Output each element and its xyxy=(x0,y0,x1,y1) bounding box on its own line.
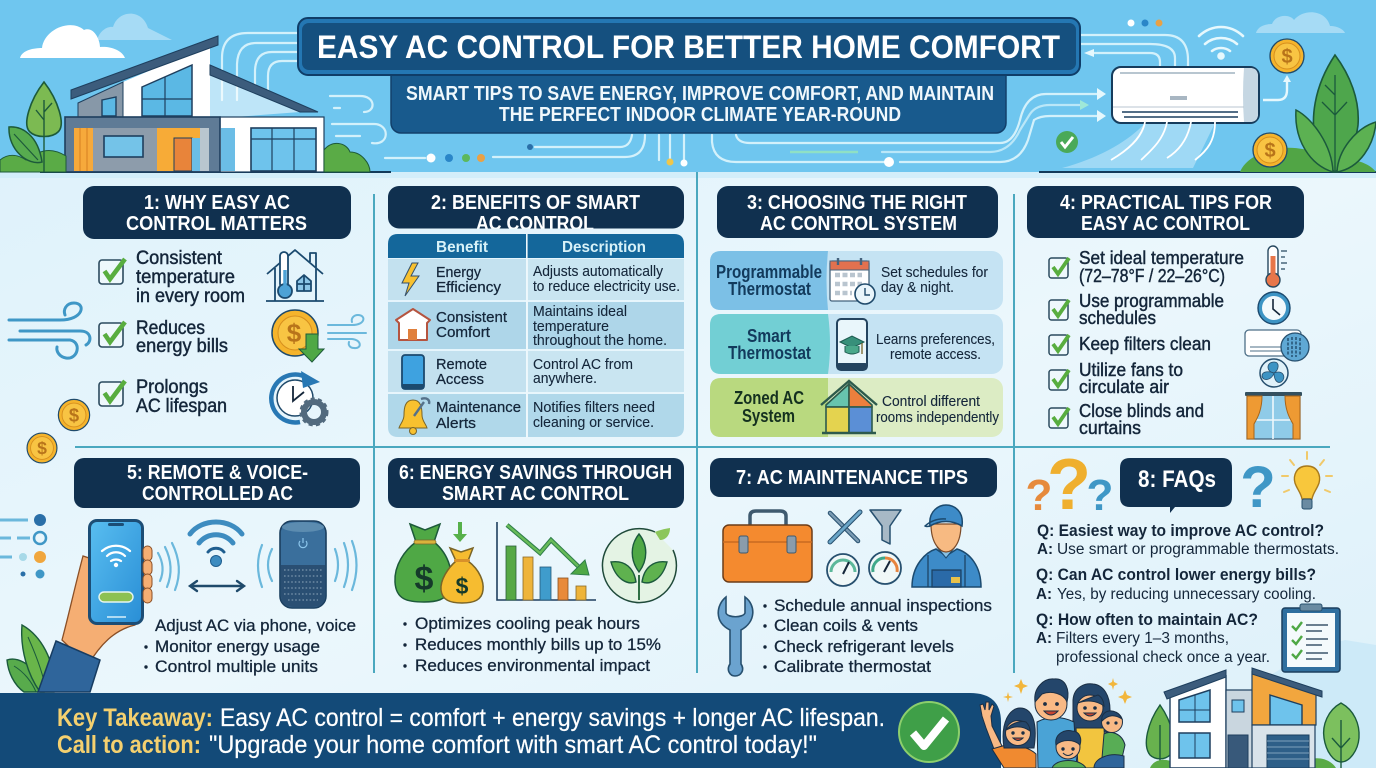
row: maintenance alerts xyxy=(399,398,655,434)
icon: question marks: ? xyxy=(1240,455,1276,520)
icon: hand holding phone xyxy=(38,519,152,692)
list: remote features: Control multiple units xyxy=(155,657,318,676)
sparkles xyxy=(1003,678,1132,704)
icon: thermometer xyxy=(1266,246,1287,287)
card: programmable thermostat: Set schedules for xyxy=(881,265,988,281)
tip: utilize fans: Utilize fans to xyxy=(1079,360,1183,380)
item: reduces energy bills: energy bills xyxy=(136,336,228,357)
row: maintenance alerts: cleaning or service. xyxy=(533,415,654,431)
icon: AC with filter xyxy=(1245,330,1309,361)
decoration: leaf bottom left xyxy=(7,625,54,692)
item: prolongs AC lifespan: AC lifespan xyxy=(136,396,227,417)
panel 2: benefits of smart AC control xyxy=(388,186,684,438)
icon: clock with gear xyxy=(271,371,327,425)
card: smart thermostat: remote access. xyxy=(890,347,981,363)
heading 4 xyxy=(1027,186,1304,238)
plants right xyxy=(1240,55,1376,172)
row: remote access: anywhere. xyxy=(533,371,597,387)
row: remote access: Remote xyxy=(436,356,487,373)
heading 6: SMART AC CONTROL xyxy=(442,483,629,505)
item: reduces energy bills: Reduces xyxy=(136,318,205,339)
faq 1: Q: Easiest way to improve AC control? xyxy=(1037,521,1324,540)
heading 3: 3: CHOOSING THE RIGHT xyxy=(747,192,967,214)
row: remote access xyxy=(402,355,633,389)
header decorative dots xyxy=(426,20,1162,166)
list: energy savings: Optimizes cooling peak hours xyxy=(415,614,640,633)
icon: technician xyxy=(912,505,981,587)
heading 5 xyxy=(74,458,360,508)
heading 8: 8: FAQs xyxy=(1138,466,1216,493)
subtitle xyxy=(406,83,994,126)
card: zoned AC system xyxy=(710,378,1003,437)
heading 1: CONTROL MATTERS xyxy=(126,213,307,235)
panel 7: AC maintenance tips xyxy=(710,458,997,676)
icon: smartphone with graduation cap xyxy=(837,319,867,370)
row: consistent comfort xyxy=(396,304,667,349)
subtitle: THE PERFECT INDOOR CLIMATE YEAR-ROUND xyxy=(499,104,901,126)
heading 1: 1: WHY EASY AC xyxy=(144,192,290,214)
cloud right xyxy=(1256,12,1345,33)
card: zoned AC system: Zoned AC xyxy=(734,388,804,408)
icon: question marks xyxy=(1026,445,1276,525)
page background xyxy=(0,172,1376,768)
heading 8 xyxy=(1120,458,1232,513)
item: consistent temperature: in every room xyxy=(136,286,245,307)
section dividers xyxy=(75,172,1330,673)
icon: crossed tools xyxy=(830,512,860,542)
icon: question marks: ? xyxy=(1087,471,1113,520)
faq 3: Filters every 1–3 months, xyxy=(1056,630,1229,647)
row: maintenance alerts: Maintenance xyxy=(436,399,521,416)
icon: smart speaker xyxy=(258,521,356,608)
heading 5: 5: REMOTE & VOICE- xyxy=(127,462,308,484)
panel 8: FAQs xyxy=(1026,445,1340,672)
faq 1 xyxy=(1037,521,1339,558)
house left xyxy=(65,36,324,172)
icon: clipboard checklist xyxy=(1282,604,1340,672)
card: programmable thermostat: Programmable xyxy=(716,262,822,282)
panel 3: choosing the right AC control system xyxy=(710,186,1003,437)
heading 4: 4: PRACTICAL TIPS FOR xyxy=(1060,192,1272,214)
subtitle: SMART TIPS TO SAVE ENERGY, IMPROVE COMFORT, AND MAINTAIN xyxy=(406,83,994,105)
benefits table xyxy=(388,234,684,438)
faq 2: Q: Can AC control lower energy bills? xyxy=(1036,565,1316,584)
tip: use programmable schedules: Use programmable xyxy=(1079,291,1224,311)
title banner xyxy=(298,18,1080,133)
key takeaway: Key Takeaway: xyxy=(57,704,213,732)
faq 2 xyxy=(1036,565,1316,603)
card: programmable thermostat xyxy=(710,251,1003,310)
icon: funnel xyxy=(870,510,901,544)
item: consistent temperature xyxy=(99,248,245,307)
footer banner xyxy=(0,693,1001,768)
heading 3 xyxy=(717,186,998,238)
faq 3 xyxy=(1036,610,1270,666)
faq 3: professional check once a year. xyxy=(1056,649,1270,666)
faq 3: Q: How often to maintain AC? xyxy=(1036,610,1258,629)
father xyxy=(1035,679,1077,768)
card: smart thermostat: Learns preferences, xyxy=(876,332,995,348)
icon: money bags: $ xyxy=(456,573,469,599)
card: smart thermostat: Thermostat xyxy=(728,343,811,363)
item: reduces energy bills xyxy=(99,318,228,357)
tip: utilize fans xyxy=(1049,359,1288,397)
list: maintenance tips: Clean coils & vents xyxy=(774,616,918,635)
title: EASY AC CONTROL FOR BETTER HOME COMFORT xyxy=(317,29,1060,65)
heading 2: AC CONTROL xyxy=(476,213,594,235)
icon: question marks: ? xyxy=(1026,471,1052,520)
card: programmable thermostat: day & night. xyxy=(881,280,954,296)
illustration: house bottom right xyxy=(1146,668,1359,768)
icon: sound waves and wifi xyxy=(158,522,244,591)
list: maintenance tips: Calibrate thermostat xyxy=(774,657,931,676)
row: remote access: Access xyxy=(436,371,484,388)
heading 4: EASY AC CONTROL xyxy=(1081,213,1250,235)
icon: gauges xyxy=(827,552,901,586)
icon: calendar and clock xyxy=(830,258,875,304)
faq 2: Yes, by reducing unnecessary cooling. xyxy=(1057,586,1316,603)
icon: green check in header xyxy=(1056,131,1078,153)
row: energy efficiency: Adjusts automatically xyxy=(533,264,664,280)
mother xyxy=(1073,684,1111,768)
baby xyxy=(1094,711,1125,768)
row: consistent comfort: throughout the home. xyxy=(533,333,667,349)
list: remote features xyxy=(144,616,356,676)
icon: coin with down arrow: $ xyxy=(287,318,302,348)
trees xyxy=(1146,703,1359,768)
tip: use programmable schedules xyxy=(1049,291,1290,328)
faq 1: Use smart or programmable thermostats. xyxy=(1057,541,1339,558)
heading 2 xyxy=(388,186,684,228)
tip: set ideal temperature xyxy=(1049,246,1287,287)
heading 6 xyxy=(388,458,684,508)
air flow lines from title to house xyxy=(222,33,684,160)
list: maintenance tips: Check refrigerant levels xyxy=(774,637,954,656)
tip: utilize fans: circulate air xyxy=(1079,377,1169,397)
row: remote access: Control AC from xyxy=(533,357,633,373)
decoration: hill behind house xyxy=(1170,640,1376,768)
heading 7 xyxy=(710,458,997,497)
tip: set ideal temperature: Set ideal temperature xyxy=(1079,248,1244,268)
plants left xyxy=(0,82,370,172)
heading 7: 7: AC MAINTENANCE TIPS xyxy=(736,467,968,489)
heading 5: CONTROLLED AC xyxy=(142,483,293,505)
faq 2: A: xyxy=(1036,586,1052,603)
tip: use programmable schedules: schedules xyxy=(1079,308,1156,328)
card: smart thermostat: Smart xyxy=(747,326,791,346)
item: prolongs AC lifespan xyxy=(99,377,227,417)
list: remote features: Adjust AC via phone, voice xyxy=(155,616,356,635)
row: maintenance alerts: Notifies filters need xyxy=(533,400,655,416)
faq 3: A: xyxy=(1036,630,1052,647)
illustration: happy family xyxy=(980,678,1132,768)
icon: eco plant circle xyxy=(602,528,676,603)
row: consistent comfort: Maintains ideal xyxy=(533,304,627,320)
panel 5: remote and voice-controlled AC xyxy=(0,458,360,692)
panel 4: practical tips xyxy=(1027,186,1309,439)
list: remote features: Monitor energy usage xyxy=(155,637,320,656)
tip: keep filters clean xyxy=(1049,330,1309,361)
clouds left xyxy=(20,14,172,58)
icon: question marks: ? xyxy=(1047,445,1091,525)
item: consistent temperature: Consistent xyxy=(136,248,223,269)
row: maintenance alerts: Alerts xyxy=(436,415,476,432)
row: consistent comfort: Comfort xyxy=(436,324,491,341)
son xyxy=(1052,731,1086,768)
card: zoned AC system: System xyxy=(742,406,795,426)
icon: house with thermometer xyxy=(266,250,324,301)
daughter waving xyxy=(980,702,1036,768)
row: consistent comfort: temperature xyxy=(533,319,609,335)
card: zoned AC system: Control different xyxy=(882,394,980,410)
icon: large check circle xyxy=(899,702,959,762)
icon: money bags xyxy=(395,522,483,603)
row: consistent comfort: Consistent xyxy=(436,309,508,326)
icon: light bulb xyxy=(1282,452,1332,509)
tip: close blinds xyxy=(1049,392,1302,439)
icon: coin with down arrow xyxy=(272,310,324,362)
heading 6: 6: ENERGY SAVINGS THROUGH xyxy=(399,462,672,484)
list: maintenance tips: Schedule annual inspections xyxy=(774,596,992,615)
row: energy efficiency: to reduce electricity use. xyxy=(533,279,680,295)
tip: close blinds: Close blinds and xyxy=(1079,401,1204,421)
icon: toolbox xyxy=(723,511,812,582)
icon: fan xyxy=(1260,359,1288,387)
heading 2: 2: BENEFITS OF SMART xyxy=(431,192,640,214)
icon: wall clock xyxy=(1258,292,1290,324)
tip: set ideal temperature: (72–78°F / 22–26°C) xyxy=(1079,266,1225,286)
icon: coins and arrow top right xyxy=(1263,39,1304,100)
icon: zoned house xyxy=(821,381,877,433)
icon: money bags: $ xyxy=(415,560,434,598)
row: energy efficiency: Energy xyxy=(436,264,481,281)
icon: wifi top right xyxy=(1199,27,1243,58)
card: programmable thermostat: Thermostat xyxy=(728,279,811,299)
heading 1 xyxy=(83,186,351,239)
benefits table: Description xyxy=(562,239,646,256)
panel 1: why easy AC control matters xyxy=(83,186,366,425)
list: maintenance tips xyxy=(763,596,992,676)
item: prolongs AC lifespan: Prolongs xyxy=(136,377,208,398)
panel 6: energy savings xyxy=(388,458,684,675)
tip: close blinds: curtains xyxy=(1079,418,1141,438)
item: consistent temperature: temperature xyxy=(136,267,235,288)
heading 3: AC CONTROL SYSTEM xyxy=(760,213,957,235)
card: smart thermostat xyxy=(710,314,1003,374)
call to action: "Upgrade your home comfort with smart AC control today!" xyxy=(209,731,817,759)
row: energy efficiency xyxy=(402,263,680,296)
faq 1: A: xyxy=(1037,541,1053,558)
air flow lines to AC xyxy=(712,35,1188,167)
list: energy savings: Reduces environmental impact xyxy=(415,656,650,675)
chart: falling bars xyxy=(497,522,596,600)
tip: keep filters clean: Keep filters clean xyxy=(1079,334,1211,354)
decoration: connection dots xyxy=(0,514,46,578)
benefits table: Benefit xyxy=(436,239,489,256)
icon: air conditioner unit xyxy=(1062,67,1259,168)
icon: window with curtains xyxy=(1245,392,1302,439)
list: energy savings: Reduces monthly bills up to 15% xyxy=(415,635,661,654)
card: zoned AC system: rooms independently xyxy=(876,410,1000,426)
key takeaway: Easy AC control = comfort + energy savings + longer AC lifespan. xyxy=(220,704,885,732)
row: energy efficiency: Efficiency xyxy=(436,279,502,296)
list: energy savings xyxy=(403,614,661,675)
call to action: Call to action: xyxy=(57,731,201,759)
icon: wind right xyxy=(328,315,366,348)
icon: large wrench xyxy=(718,597,753,676)
decoration: wind and coins left xyxy=(9,303,90,463)
